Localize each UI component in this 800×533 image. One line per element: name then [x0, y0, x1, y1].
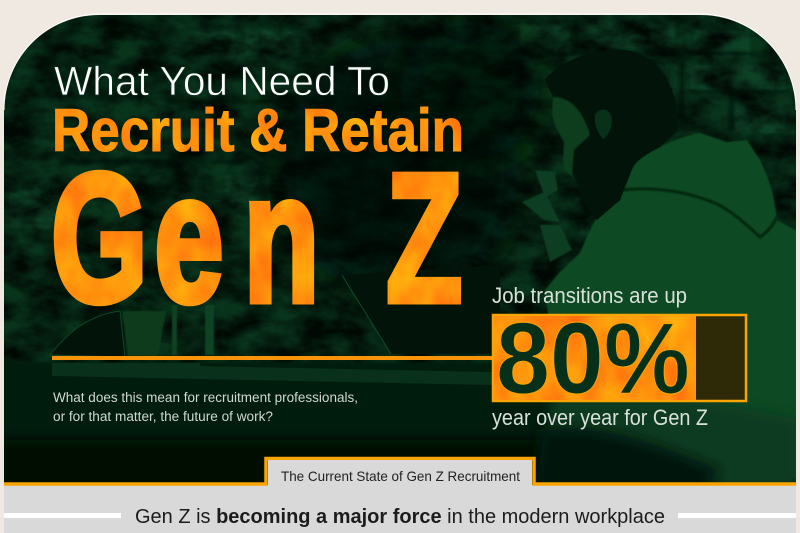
tab fill	[268, 460, 532, 486]
wall grain	[4, 15, 796, 364]
stat label top: Job transitions are up	[492, 283, 687, 308]
right white rule	[678, 513, 796, 518]
desk band	[52, 363, 492, 385]
dark shadow at the wall's top right	[438, 18, 548, 150]
man's face	[552, 97, 590, 176]
stat number: 80%	[496, 303, 690, 415]
section tab label: The Current State of Gen Z Recruitment	[281, 468, 520, 484]
left white rule	[4, 513, 121, 518]
title line 2: Recruit & Retain	[52, 97, 464, 164]
stat progress bar	[493, 315, 746, 401]
ear	[595, 110, 612, 139]
brick wall	[10, 20, 790, 228]
bottle	[172, 305, 214, 355]
lower hoodie shadow	[536, 421, 722, 482]
lower hoodie shading	[545, 402, 796, 482]
intro text: or for that matter, the future of work?	[53, 409, 273, 424]
stat label bottom: year over year for Gen Z	[492, 405, 708, 430]
glass	[122, 311, 166, 356]
orange divider	[52, 356, 492, 360]
dark shadow in the wall	[280, 40, 520, 300]
hood fold shadow	[623, 189, 777, 237]
table and lower darkness	[4, 361, 551, 442]
headline: Gen Z is becoming a major force in the modern workplace	[135, 505, 665, 528]
title: Gen Z: Gen Z	[51, 136, 462, 341]
card outline	[4, 14, 796, 110]
man's hoodie	[545, 133, 800, 480]
intro text: What does this mean for recruitment professionals,	[53, 390, 358, 405]
man's head and neck	[545, 50, 678, 220]
floor shadow	[4, 437, 537, 482]
laptop edge	[342, 275, 391, 354]
bottom orange rule and tab	[4, 458, 796, 484]
panel: lower grey section	[4, 485, 796, 533]
title line 1: What You Need To	[54, 58, 390, 104]
intro text	[53, 390, 358, 424]
laptop screen	[342, 265, 500, 354]
plant	[522, 170, 572, 262]
chair shape	[50, 311, 125, 357]
